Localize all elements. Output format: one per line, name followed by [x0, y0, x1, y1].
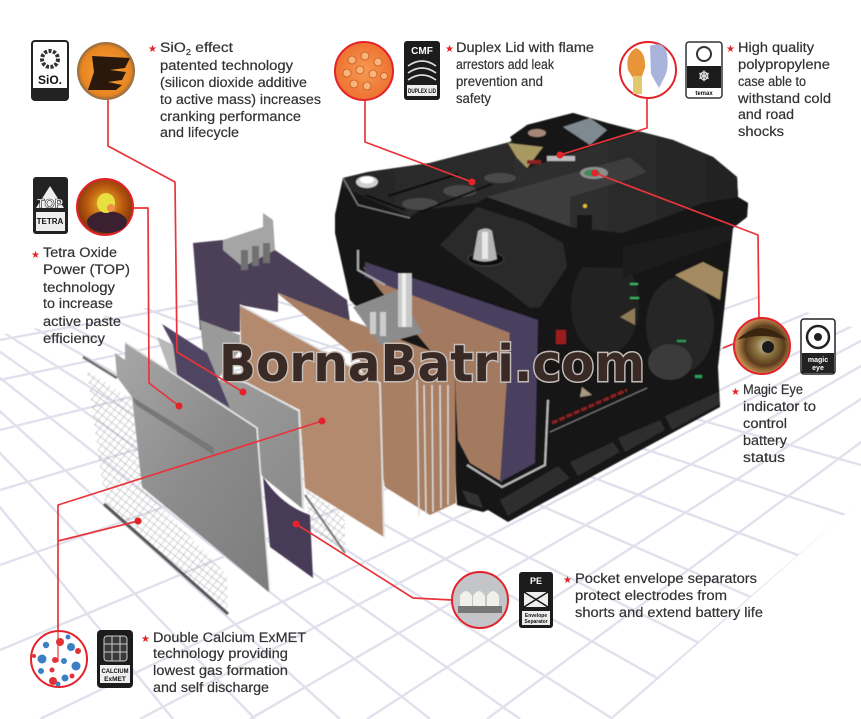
callout line: Duplex Lid — [365, 100, 476, 186]
icon: envelope badge: Envelope — [525, 613, 547, 619]
polypropylene text: ★ — [726, 44, 735, 55]
purple envelope lower — [263, 477, 313, 578]
lid top surface — [343, 113, 738, 233]
lid silhouette — [335, 113, 748, 308]
icon: SiO2 orange circle — [77, 42, 135, 100]
callout line: Tetra Oxide — [134, 208, 182, 410]
perspective floor grid — [0, 296, 861, 719]
brown front plate — [240, 305, 384, 537]
callout line: Double Calcium — [58, 418, 326, 630]
icon: eye circle — [734, 318, 790, 374]
Tetra Oxide text: Tetra Oxide — [43, 245, 117, 260]
Tetra Oxide text: technology — [43, 280, 115, 295]
icon: CMF badge: CMF — [411, 46, 433, 57]
SiO2 text: 2 — [186, 48, 192, 57]
Duplex text: ★ — [445, 44, 454, 55]
Tetra Oxide text: Power (TOP) — [43, 262, 130, 277]
icon: separator pocket circle — [452, 572, 508, 628]
Double Calcium text: and self discharge — [153, 680, 269, 695]
light lug on envelope — [157, 337, 177, 375]
grey top connector — [223, 213, 275, 270]
plate edge lines — [417, 380, 448, 516]
internal right face components — [550, 240, 723, 432]
polypropylene text: High quality — [738, 40, 814, 55]
icon: calcium badge — [97, 630, 133, 688]
icon: envelope badge — [519, 572, 553, 628]
large terminal post — [468, 228, 504, 266]
Duplex text: Duplex Lid with flame — [456, 40, 594, 55]
icon: envelope badge: Separator — [524, 619, 548, 625]
battery base with feet — [462, 392, 720, 516]
callout line: polypropylene — [556, 98, 647, 158]
Duplex text: safety — [456, 91, 491, 106]
icon: temperature badge: temax — [695, 91, 713, 97]
Magic Eye text — [731, 382, 816, 465]
icon: TOP badge: TETRA — [37, 217, 64, 226]
Magic Eye text: Magic Eye — [743, 382, 803, 397]
polypropylene text: case able to — [738, 74, 806, 89]
icon: calcium badge: ExMET — [104, 676, 126, 683]
Tetra Oxide text: active paste — [43, 314, 121, 329]
icon: magic eye badge — [801, 319, 835, 374]
Magic Eye text: ★ — [731, 387, 740, 398]
Tetra Oxide text: to increase — [43, 296, 113, 311]
polypropylene text: and road — [738, 107, 794, 122]
Magic Eye text: status — [743, 450, 785, 465]
interior brown plates — [363, 267, 510, 482]
SiO2 text: effect — [191, 40, 233, 55]
icon: Duplex circle — [335, 42, 393, 100]
Tetra Oxide text: ★ — [31, 250, 40, 261]
exploded plate pack — [83, 213, 456, 614]
icon: temperature badge — [686, 42, 722, 98]
polypropylene text: polypropylene — [738, 57, 830, 72]
yellow vent — [577, 204, 592, 241]
SiO2 text: cranking performance — [160, 109, 301, 124]
interior purple stack edge — [365, 262, 538, 482]
battery — [335, 113, 748, 522]
terminal ledge — [440, 207, 567, 308]
Double Calcium text: lowest gas formation — [153, 663, 288, 678]
icon: SiO badge: SiO. — [38, 73, 62, 87]
icon: magic eye badge: eye — [812, 365, 824, 372]
lid right band — [623, 223, 733, 278]
icon: CMF badge — [404, 41, 440, 100]
SiO2 text — [148, 40, 321, 140]
grey lug at back — [200, 320, 240, 380]
icon: TOP circle — [77, 179, 133, 235]
icon: magic eye badge: magic — [808, 357, 828, 364]
icon: TOP badge: TOP — [37, 196, 64, 211]
Double Calcium text: ★ — [141, 634, 150, 645]
mesh grid — [87, 370, 228, 613]
battery black backing — [335, 113, 748, 522]
polypropylene text: withstand cold — [737, 91, 831, 106]
lid left edge highlight — [343, 178, 410, 218]
lid cell caps — [365, 173, 516, 212]
SiO2 text: (silicon dioxide additive — [160, 75, 307, 90]
magic eye window — [580, 167, 608, 179]
icon: calcium circle — [31, 631, 87, 687]
polypropylene text: shocks — [738, 124, 784, 139]
icon: CMF badge: DUPLEX LID — [408, 89, 437, 95]
callout line: Pocket separators — [292, 520, 452, 600]
Pocket separators text: shorts and extend battery life — [575, 605, 763, 620]
icon: SiO badge — [32, 41, 68, 100]
icon: envelope badge: PE — [530, 576, 542, 586]
Magic Eye text: control — [743, 416, 787, 431]
SiO2 text: and lifecycle — [160, 125, 239, 140]
icon: calcium badge: CALCIUM — [102, 668, 128, 675]
Pocket separators text: ★ — [563, 575, 572, 586]
Pocket separators text: protect electrodes from — [575, 588, 727, 603]
Duplex text: arrestors add leak — [456, 57, 554, 72]
Pocket separators text: Pocket envelope separators — [575, 571, 757, 586]
Tetra Oxide text — [31, 245, 130, 346]
grey front plate — [115, 342, 270, 593]
brown rear plate — [277, 293, 456, 515]
Magic Eye text: indicator to — [743, 399, 816, 414]
mesh behind plates — [305, 488, 345, 552]
icon: hot and cold circle — [620, 42, 676, 98]
purple separator back stack — [193, 240, 350, 332]
Double Calcium text: Double Calcium ExMET — [153, 630, 306, 645]
polypropylene text — [726, 40, 831, 139]
Double Calcium text — [141, 630, 306, 695]
Pocket separators text — [563, 571, 763, 620]
watermark: BornaBatri.com — [219, 335, 645, 394]
SiO2 text: SiO — [160, 40, 183, 55]
Magic Eye text: battery — [743, 433, 787, 448]
callout line: Magic Eye — [592, 170, 759, 348]
Tetra Oxide text: efficiency — [43, 331, 105, 346]
Double Calcium text: technology providing — [153, 646, 288, 661]
SiO2 text: patented technology — [160, 58, 293, 73]
SiO2 text: ★ — [148, 44, 157, 55]
lid recess panel — [487, 157, 647, 226]
Duplex text — [445, 40, 594, 106]
small terminal post — [356, 176, 378, 188]
callout line: SiO2 — [108, 100, 246, 396]
icon: temperature badge: ❄ — [698, 68, 710, 84]
icon: TOP badge — [33, 177, 68, 234]
interior white frame line — [467, 400, 548, 487]
grey plate rear — [177, 375, 304, 510]
purple envelope top — [162, 324, 230, 408]
sticker on lid — [508, 113, 637, 168]
SiO2 text: to active mass) increases — [160, 92, 321, 107]
second connector and post — [353, 273, 423, 345]
Duplex text: prevention and — [456, 74, 543, 89]
